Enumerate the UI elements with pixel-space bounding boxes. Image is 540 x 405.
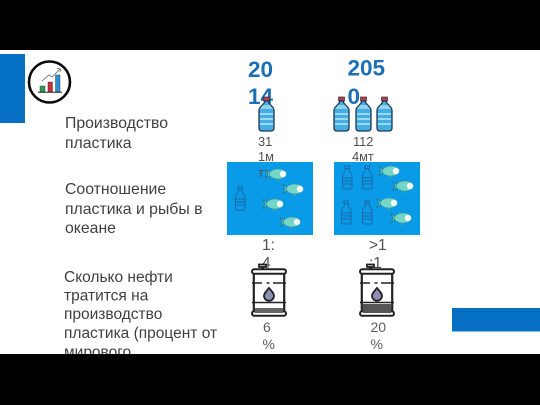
label: 20 percent: % [370, 336, 383, 352]
heading: plastic to fish ratio: океане [65, 220, 116, 237]
label: 1124 Mt: 112 [353, 134, 373, 149]
icons: 2050 bottles [334, 97, 392, 131]
label: 311 Mt: т: [258, 165, 267, 180]
right blue accent block [452, 308, 540, 332]
year 2050: 205 [348, 56, 385, 80]
heading: oil used for plastic: мирового [64, 344, 131, 361]
icons: fish [263, 168, 304, 229]
panel: ocean 2014 [227, 162, 313, 235]
heading: oil used for plastic: пластика (процент от [64, 325, 217, 342]
label: 311 Mt: 1м [258, 149, 274, 164]
heading: oil used for plastic: тратится на [64, 288, 149, 304]
bottom black bar [0, 354, 540, 405]
icon: plastic bottle [236, 187, 245, 210]
panel: ocean 2050 [334, 162, 420, 235]
icon: 2014 bottle [259, 97, 274, 131]
heading: plastic to fish ratio: пластика и рыбы в [65, 201, 202, 218]
label: 1124 Mt: 4мт [352, 149, 374, 164]
label: 311 Mt: 31 [258, 134, 272, 149]
heading: plastic production: пластика [65, 135, 132, 152]
top black bar [0, 0, 540, 50]
heading: plastic to fish ratio: Соотношение [65, 181, 166, 198]
label: ratio >1:1: :1 [369, 255, 382, 272]
year 2014: 14 [248, 84, 274, 109]
heading: oil used for plastic: Сколько нефти [64, 269, 173, 286]
icon: barrel 6 percent [252, 264, 286, 316]
label: 6 percent: 6 [263, 319, 271, 335]
icons: fish [377, 166, 414, 225]
label: ratio 1:4: 4 [262, 255, 271, 272]
heading: oil used for plastic: производство [64, 306, 162, 323]
icon: barrel 20 percent [360, 264, 394, 316]
label: ratio >1:1: >1 [369, 237, 387, 254]
left blue accent block [0, 54, 25, 123]
label: ratio 1:4: 1: [262, 237, 275, 254]
year 2014: 20 [248, 57, 273, 82]
label: 6 percent: % [262, 336, 275, 352]
year 2050: 0 [348, 84, 360, 109]
heading: plastic production: Производство [65, 115, 168, 132]
icons: plastic bottles [342, 166, 372, 224]
icon: growth chart in circle [29, 62, 70, 102]
label: 20 percent: 20 [370, 319, 386, 335]
